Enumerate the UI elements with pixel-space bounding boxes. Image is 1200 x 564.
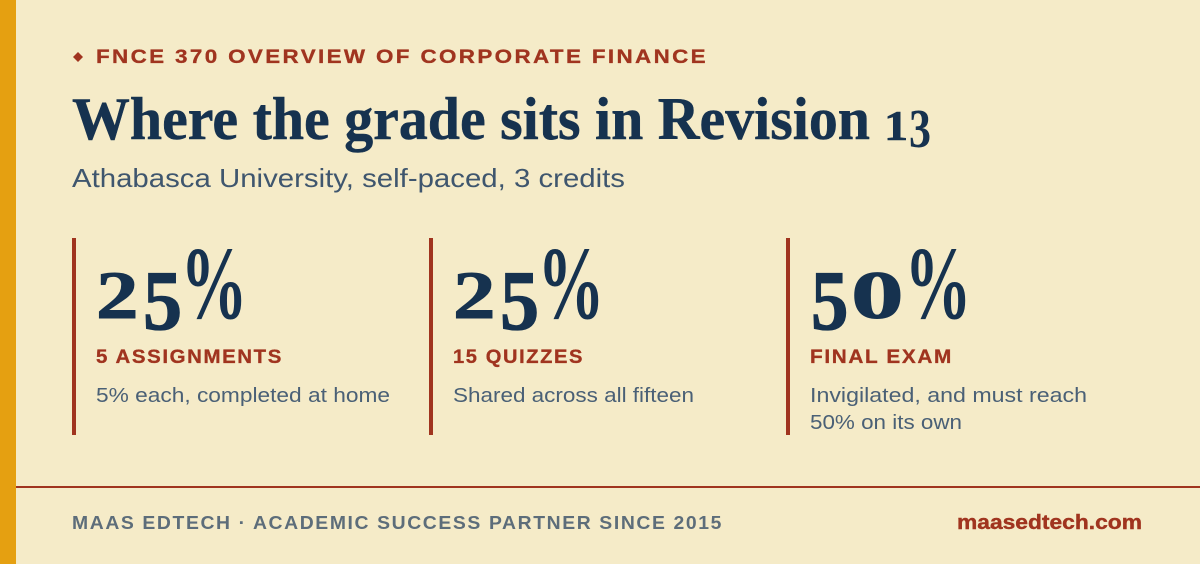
value: 25%: % xyxy=(538,226,604,341)
title: 3 xyxy=(909,98,931,159)
stat: 15 quizzes xyxy=(429,226,694,435)
label: 15 QUIZZES xyxy=(453,347,584,368)
value: 25% xyxy=(96,226,248,348)
label: FINAL EXAM xyxy=(810,347,953,368)
title: Where the grade sits in Revision xyxy=(72,86,870,152)
description: Shared across all fifteen xyxy=(453,385,694,407)
value: 25% xyxy=(453,226,604,348)
footer: website: maasedtech.com xyxy=(957,512,1142,534)
title: 1 xyxy=(884,103,908,149)
value: 25%: 5 xyxy=(143,253,182,348)
description: 50% on its own xyxy=(810,412,962,434)
label: 5 ASSIGNMENTS xyxy=(96,347,283,368)
eyebrow: course name: FNCE 370 OVERVIEW OF CORPORATE FINANCE xyxy=(96,47,708,68)
stat: 5 assignments xyxy=(72,226,390,435)
value: 50%: 0 xyxy=(851,258,904,333)
footer: organisation: MAAS EDTECH · ACADEMIC SUCCESS PARTNER SINCE 2015 xyxy=(72,513,723,533)
value: 50% xyxy=(811,226,972,348)
value: 25%: % xyxy=(180,226,248,341)
description: 5% each, completed at home xyxy=(96,385,390,407)
description: Invigilated, and must reach xyxy=(810,385,1087,407)
value: 25%: 2 xyxy=(96,257,138,333)
value: 25%: 2 xyxy=(453,257,495,333)
subtitle: Athabasca University, self-paced, 3 credits xyxy=(72,163,625,193)
value: 25%: 5 xyxy=(500,253,539,348)
value: 50%: 5 xyxy=(811,255,848,348)
value: 50%: % xyxy=(904,226,972,341)
description xyxy=(810,385,1087,434)
stat: final exam xyxy=(786,226,1087,435)
